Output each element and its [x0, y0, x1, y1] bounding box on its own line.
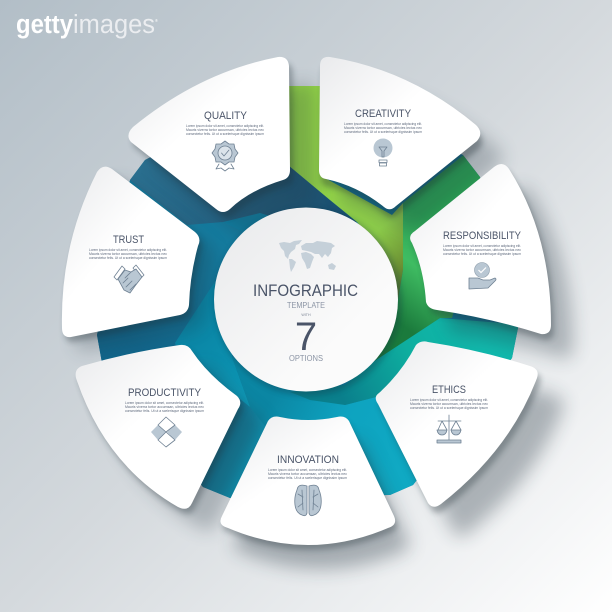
card shadows: [76, 81, 573, 569]
panel: innovation: INNOVATION: [277, 454, 339, 466]
panel: quality: Lorem ipsum dolor sit amet, consectetur adipiscing elit.: [186, 124, 264, 128]
icon: puzzle: [151, 417, 182, 447]
panel: ethics: ETHICS: [432, 384, 466, 396]
panel: productivity: PRODUCTIVITY: [128, 387, 202, 399]
panel: creativity: Mauris viverra tortor accumsan, ultricies lectus nec: [344, 126, 422, 130]
segment: creativity: [288, 80, 403, 300]
panel: quality: [128, 57, 290, 212]
panel: ethics: Mauris viverra tortor accumsan, ultricies lectus nec: [410, 402, 488, 406]
icon: award badge: [212, 141, 238, 171]
panel: responsibility: Lorem ipsum dolor sit amet, consectetur adipiscing elit.: [443, 244, 521, 248]
segmented colour ring: [97, 86, 518, 498]
subtitle: with: WITH: [301, 313, 311, 317]
panel: innovation: Mauris viverra tortor accumsan, ultricies lectus nec: [268, 472, 347, 476]
panel: creativity: [319, 57, 480, 209]
number: 7: 7: [295, 315, 317, 359]
panel: trust: Mauris viverra tortor accumsan, ultricies lectus nec: [89, 252, 167, 256]
icon: handshake: [114, 265, 144, 293]
segment: innovation: [234, 361, 416, 496]
panel: innovation: Lorem ipsum dolor sit amet, consectetur adipiscing elit.: [268, 468, 347, 472]
segment: quality: [130, 157, 356, 225]
panel: productivity: Mauris viverra tortor accumsan, ultricies lectus nec: [125, 405, 204, 409]
panel: quality: QUALITY: [204, 110, 248, 122]
segment: productivity: [201, 284, 265, 498]
subtitle: template: TEMPLATE: [287, 301, 325, 310]
panel: trust: Lorem ipsum dolor sit amet, consectetur adipiscing elit.: [89, 248, 167, 252]
panel: productivity: [76, 345, 240, 509]
panel: innovation: [220, 416, 395, 545]
icon: hand with check: [469, 262, 496, 289]
logo: gettyimages: ®: [155, 18, 158, 23]
logo: gettyimages: [16, 11, 158, 39]
panel: ethics: [376, 341, 538, 507]
segment: responsibility: [374, 156, 480, 362]
panel: responsibility: consectetur felis. Ut ut a scelerisque dignissim ipsum: [443, 252, 521, 256]
panel: responsibility: Mauris viverra tortor accumsan, ultricies lectus nec: [443, 248, 521, 252]
title: infographic: INFOGRAPHIC: [253, 281, 358, 300]
panel: quality: consectetur felis. Ut ut a scelerisque dignissim ipsum: [186, 132, 264, 136]
inner shadow behind hub: [214, 208, 402, 396]
logo: gettyimages: getty: [16, 11, 74, 39]
panel: quality: Mauris viverra tortor accumsan, ultricies lectus nec: [186, 128, 264, 132]
panel: creativity: Lorem ipsum dolor sit amet, consectetur adipiscing elit.: [344, 122, 422, 126]
segment: ethics: [290, 318, 525, 405]
panel: productivity: Lorem ipsum dolor sit amet, consectetur adipiscing elit.: [125, 401, 204, 405]
panel: responsibility: RESPONSIBILITY: [443, 230, 522, 242]
panel: ethics: Lorem ipsum dolor sit amet, consectetur adipiscing elit.: [410, 398, 488, 402]
icon: scales: [437, 415, 461, 443]
panel: innovation: consectetur felis. Ut ut a scelerisque dignissim ipsum: [268, 476, 347, 480]
panel: trust: consectetur felis. Ut ut a scelerisque dignissim ipsum: [89, 256, 167, 260]
panel: creativity: consectetur felis. Ut ut a scelerisque dignissim ipsum: [344, 130, 422, 134]
centre circle: [214, 208, 398, 392]
panel: productivity: consectetur felis. Ut ut a scelerisque dignissim ipsum: [125, 409, 204, 413]
panel: responsibility: [410, 164, 551, 334]
segment: trust: [97, 180, 218, 360]
icon: brain: [295, 485, 321, 516]
icon: world map: [279, 240, 336, 272]
logo: gettyimages: images: [73, 11, 155, 39]
subtitle: options: OPTIONS: [289, 354, 323, 363]
icon: light bulb: [374, 138, 392, 166]
panel: ethics: consectetur felis. Ut ut a scelerisque dignissim ipsum: [410, 406, 488, 410]
panel: trust: TRUST: [113, 234, 144, 246]
panel: creativity: CREATIVITY: [355, 108, 412, 120]
panel: trust: [62, 167, 199, 337]
